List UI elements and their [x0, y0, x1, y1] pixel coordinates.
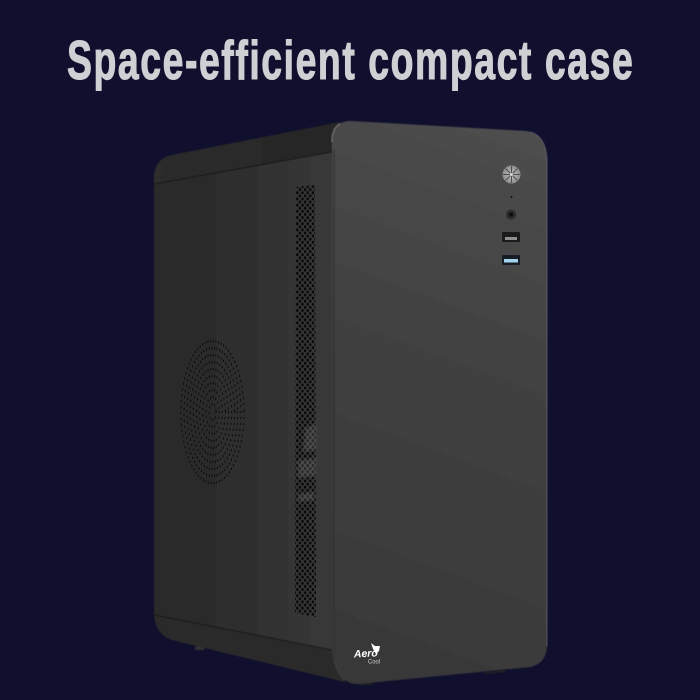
computer case: [154, 121, 547, 685]
vent reflections: [298, 424, 316, 502]
USB port 2.0: [502, 232, 520, 242]
foot: rear: [195, 646, 205, 650]
front corner highlight: [332, 124, 340, 142]
logo subtext: Cool: [368, 658, 380, 666]
USB port 3.0: [502, 255, 520, 265]
LED dot: [510, 196, 512, 198]
side vent strip: [295, 185, 316, 617]
audio jack: [506, 210, 516, 220]
front left bevel shadow: [333, 150, 335, 660]
power button: [502, 166, 520, 184]
bottom seam: [154, 615, 332, 650]
bottom edge: [154, 615, 345, 682]
AeroCool logo: [353, 643, 380, 666]
case body: [154, 121, 547, 685]
front panel highlight: [530, 132, 547, 646]
side panel: [154, 122, 345, 682]
top seam: [154, 152, 332, 184]
top edge: [154, 122, 340, 184]
front panel: [332, 121, 547, 684]
logo wordmark: Aero: [353, 647, 379, 661]
side fan grille: [181, 341, 244, 483]
title: Space-efficient compact case: [67, 29, 633, 91]
logo wing: [371, 643, 380, 654]
front feet: [358, 670, 505, 685]
